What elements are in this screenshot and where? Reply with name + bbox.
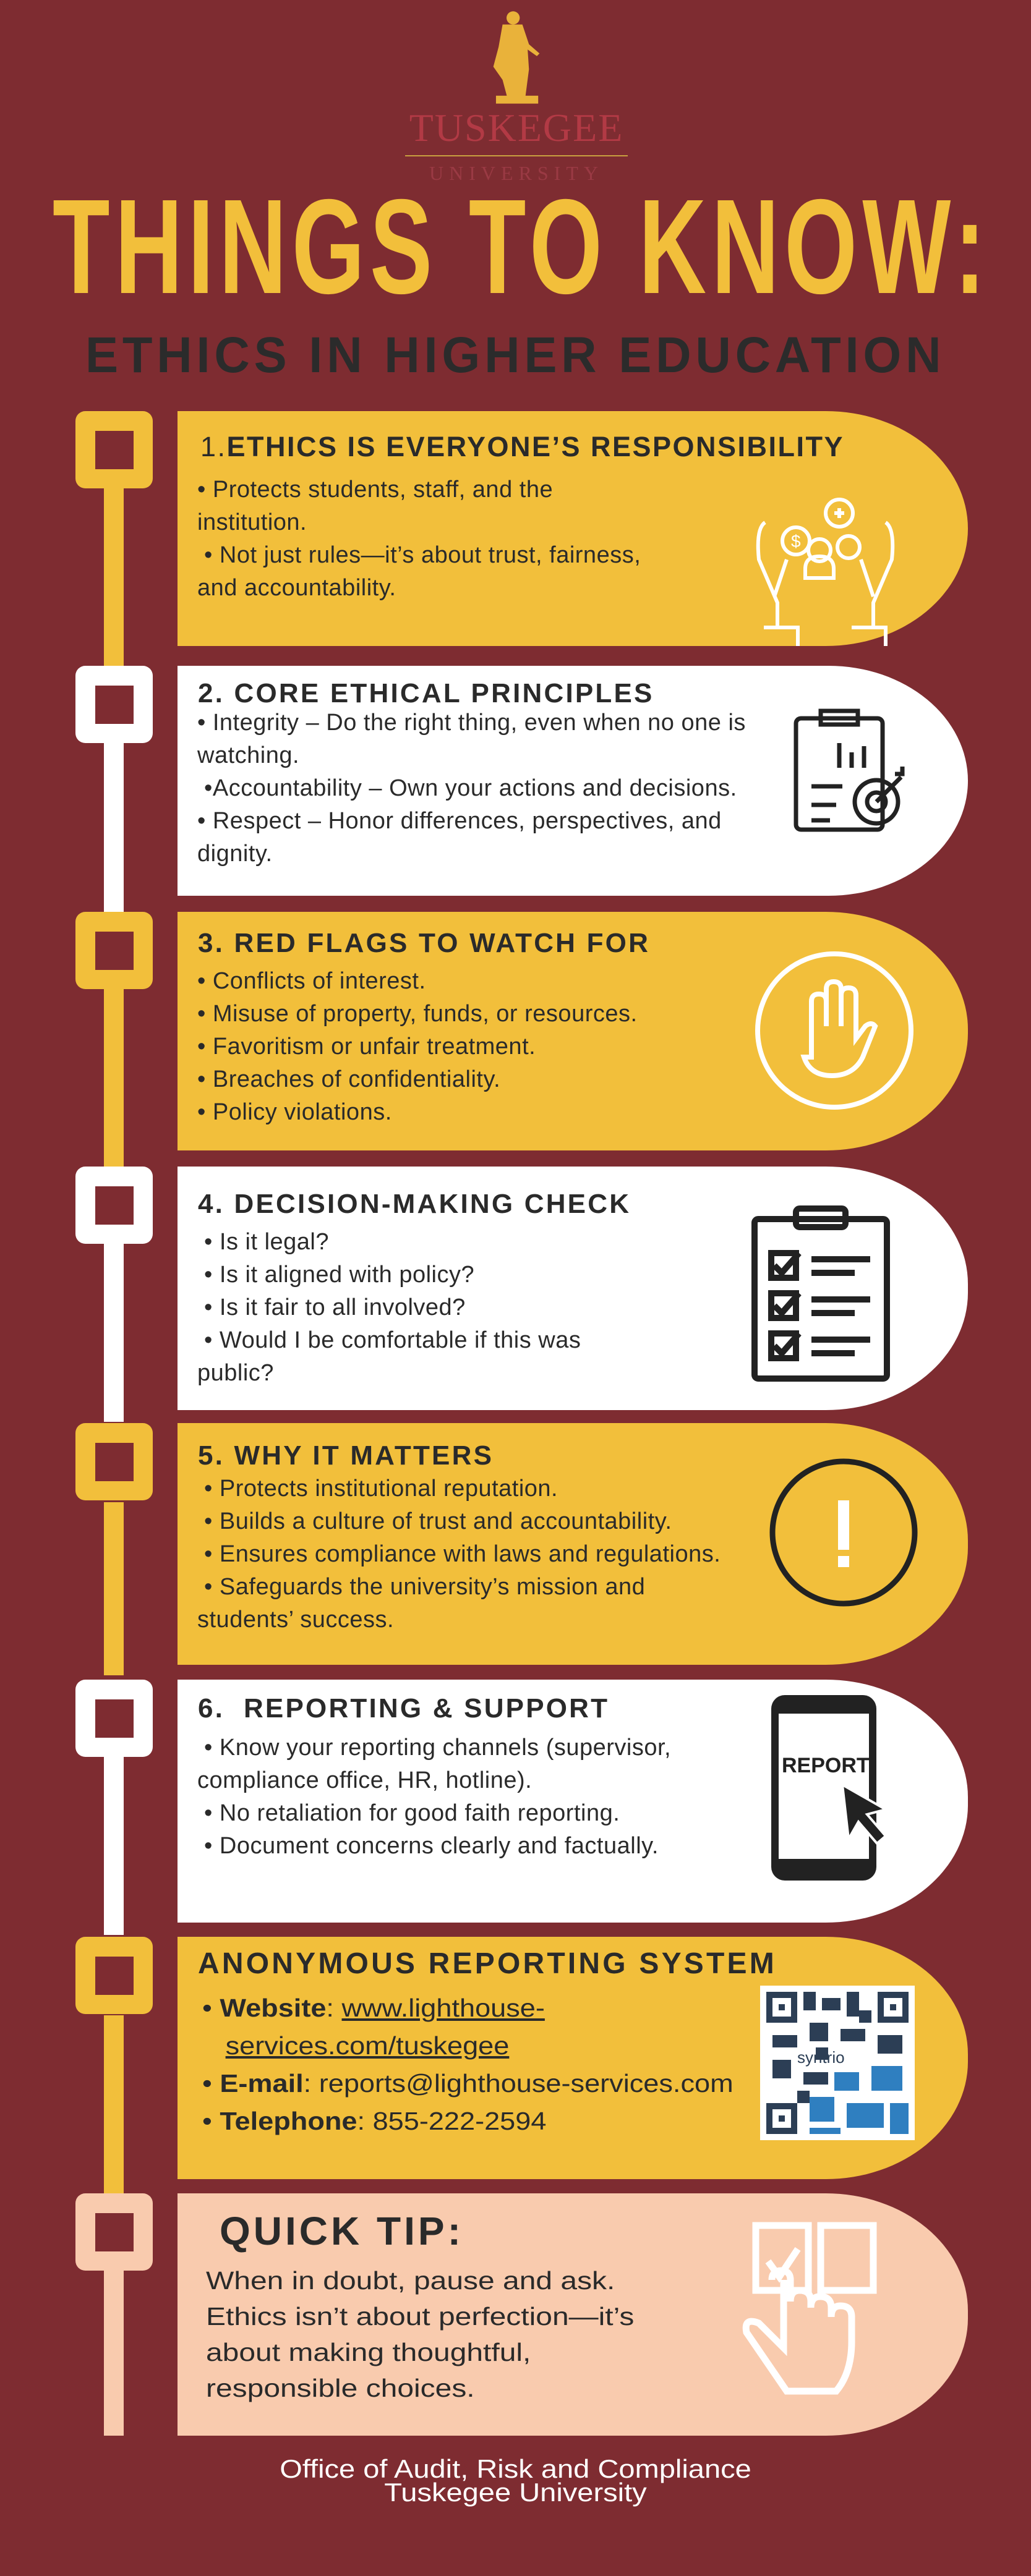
- panel 2: [178, 666, 968, 896]
- QR code: syntrio: [797, 2048, 845, 2067]
- contact list: • Website: www.lighthouse-: [202, 1994, 545, 2022]
- text 2: dignity.: [197, 841, 273, 867]
- icon: hands: $: [791, 532, 801, 551]
- text 2: [197, 710, 746, 867]
- text 4: public?: [197, 1360, 274, 1386]
- icon: checklist: [751, 1205, 890, 1382]
- text 4: • Would I be comfortable if this was: [204, 1327, 581, 1353]
- text 5: • Ensures compliance with laws and regulations.: [204, 1541, 721, 1567]
- panel 4: [178, 1167, 968, 1410]
- icon: pointing hand checkbox: [742, 2222, 877, 2395]
- contact list: • E-mail: reports@lighthouse-services.com: [202, 2069, 734, 2098]
- panel 7: anonymous reporting: [178, 1937, 968, 2179]
- footer: Office of Audit, Risk and Compliance: [280, 2454, 751, 2483]
- icon: phone report: [771, 1695, 884, 1881]
- title: THINGS TO KNOW:: [53, 172, 991, 322]
- timeline: [75, 411, 153, 2436]
- footer: Tuskegee University: [384, 2478, 647, 2507]
- text 3: • Misuse of property, funds, or resources.: [197, 1001, 638, 1027]
- text 4: • Is it legal?: [204, 1229, 329, 1255]
- icon: statue: [494, 11, 539, 104]
- contact list: services.com/tuskegee: [226, 2031, 509, 2060]
- logo: [405, 11, 628, 184]
- icon: hands: [756, 498, 894, 646]
- text 5: • Safeguards the university’s mission and: [204, 1574, 645, 1600]
- text: TUSKEGEE: TUSKEGEE: [409, 106, 623, 150]
- text 4: • Is it aligned with policy?: [204, 1262, 474, 1288]
- text 3: • Favoritism or unfair treatment.: [197, 1034, 536, 1060]
- text 2: •Accountability – Own your actions and decisions.: [204, 775, 737, 801]
- text 5: • Protects institutional reputation.: [204, 1476, 558, 1502]
- icon: clipboard target: [794, 708, 904, 832]
- panel 8: quick tip: [178, 2193, 968, 2436]
- QR code: [760, 1986, 915, 2140]
- icon: exclamation circle: [769, 1459, 918, 1606]
- contact list: • Telephone: 855-222-2594: [202, 2107, 546, 2135]
- text 6: • Know your reporting channels (supervisor,: [204, 1735, 671, 1761]
- text 6: • Document concerns clearly and factually.: [204, 1833, 659, 1859]
- text 5: students’ success.: [197, 1607, 394, 1633]
- text 1: [197, 477, 641, 601]
- text 8: about making thoughtful,: [206, 2338, 531, 2366]
- text 4: [197, 1229, 581, 1386]
- heading 8: QUICK TIP:: [220, 2209, 464, 2253]
- text 2: watching.: [197, 742, 299, 768]
- subtitle: ETHICS IN HIGHER EDUCATION: [85, 327, 945, 383]
- text 6: compliance office, HR, hotline).: [197, 1767, 532, 1793]
- text 3: • Policy violations.: [197, 1099, 392, 1125]
- heading 1: 1.ETHICS IS EVERYONE’S RESPONSIBILITY: [200, 431, 844, 462]
- icon: stop hand: [755, 951, 913, 1110]
- heading 6: 6. REPORTING & SUPPORT: [198, 1693, 609, 1724]
- text 6: [197, 1735, 671, 1859]
- text 8: Ethics isn’t about perfection—it’s: [206, 2302, 634, 2331]
- text 3: • Conflicts of interest.: [197, 968, 426, 994]
- heading 2: 2. CORE ETHICAL PRINCIPLES: [198, 678, 654, 708]
- text 5: • Builds a culture of trust and accountability.: [204, 1508, 672, 1534]
- contact list: [202, 1994, 734, 2135]
- text 1: institution.: [197, 509, 307, 535]
- text 3: • Breaches of confidentiality.: [197, 1066, 500, 1092]
- text 5: [197, 1476, 721, 1633]
- panel 3: [178, 912, 968, 1150]
- panel 6: [178, 1680, 968, 1923]
- text 8: [206, 2266, 634, 2402]
- text 1: • Not just rules—it’s about trust, fairness,: [204, 542, 641, 568]
- heading 5: 5. WHY IT MATTERS: [198, 1440, 494, 1471]
- text 1: and accountability.: [197, 575, 396, 601]
- text 3: [197, 968, 638, 1125]
- icon: phone report: REPORT: [782, 1754, 870, 1777]
- panel 5: [178, 1423, 968, 1665]
- footer: [280, 2454, 751, 2507]
- text: UNIVERSITY: UNIVERSITY: [429, 162, 604, 184]
- text 2: • Integrity – Do the right thing, even when no one is: [197, 710, 746, 736]
- heading 3: 3. RED FLAGS TO WATCH FOR: [198, 928, 650, 958]
- heading 4: 4. DECISION-MAKING CHECK: [198, 1189, 631, 1219]
- panel 1: [178, 411, 968, 646]
- text 8: When in doubt, pause and ask.: [206, 2266, 615, 2295]
- text 1: • Protects students, staff, and the: [197, 477, 553, 503]
- text 8: responsible choices.: [206, 2374, 475, 2402]
- text 2: • Respect – Honor differences, perspectives, and: [197, 808, 722, 834]
- text 4: • Is it fair to all involved?: [204, 1294, 466, 1320]
- heading 7: ANONYMOUS REPORTING SYSTEM: [198, 1947, 777, 1980]
- text 6: • No retaliation for good faith reporting.: [204, 1800, 620, 1826]
